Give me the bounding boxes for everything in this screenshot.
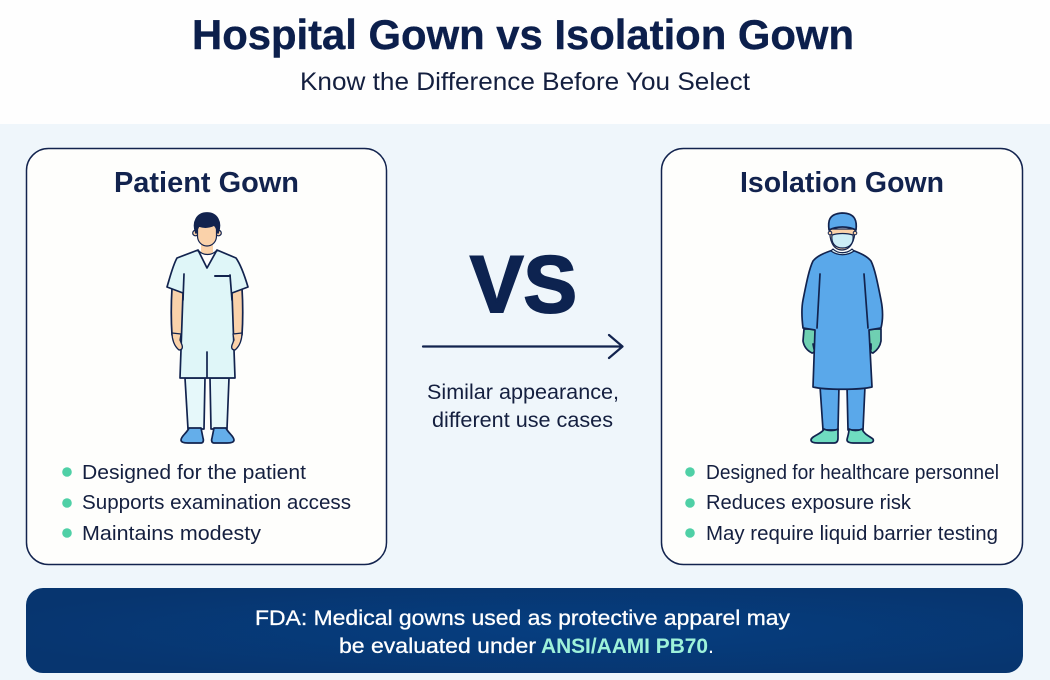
panel: isolation gown — [662, 148, 1022, 564]
list: patient gown points: Maintains modesty — [82, 523, 261, 545]
list: isolation gown points: Designed for healthcare personnel — [706, 462, 999, 484]
title: Hospital Gown vs Isolation Gown — [192, 11, 854, 58]
list: patient gown points: Designed for the patient — [82, 462, 306, 484]
list: isolation gown points: May require liquid barrier testing — [706, 523, 998, 545]
callout: FDA banner: ANSI/AAMI PB70 — [541, 634, 708, 658]
list: isolation gown points: Reduces exposure risk — [706, 492, 912, 514]
panel: patient gown — [26, 148, 386, 564]
callout: FDA banner: be evaluated under — [339, 634, 536, 658]
callout: FDA banner: . — [708, 634, 714, 658]
icon: patient in gown — [167, 213, 248, 443]
callout: FDA banner — [26, 588, 1023, 673]
subtitle: Know the Difference Before You Select — [300, 68, 750, 96]
list: patient gown points — [62, 462, 351, 545]
vs label: VS — [470, 240, 577, 330]
list: patient gown points: Supports examination access — [82, 492, 351, 514]
center caption — [427, 381, 619, 432]
list: isolation gown points — [685, 462, 999, 545]
center caption: different use cases — [432, 409, 613, 432]
heading: patient gown: Patient Gown — [114, 167, 299, 199]
heading: isolation gown: Isolation Gown — [740, 167, 944, 199]
center caption: Similar appearance, — [427, 381, 619, 404]
arrow — [423, 335, 622, 358]
callout: FDA banner: FDA: Medical gowns used as protective apparel may — [255, 606, 790, 630]
icon: staff in isolation gown — [802, 213, 882, 443]
